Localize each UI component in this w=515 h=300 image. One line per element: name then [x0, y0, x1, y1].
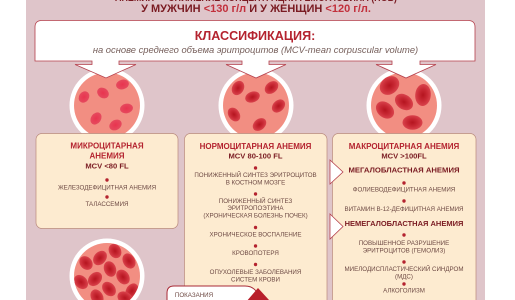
heading: classification: КЛАССИФИКАЦИЯ:	[195, 29, 315, 43]
panel: macrocytic: MCV >100FL	[381, 152, 427, 160]
panel: macrocytic: ЭРИТРОЦИТОВ (ГЕМОЛИЗ)	[363, 248, 445, 254]
panel: normocytic: ХРОНИЧЕСКОЕ ВОСПАЛЕНИЕ	[210, 232, 301, 238]
panel: macrocytic	[332, 134, 476, 300]
panel: normocytic: (ХРОНИЧЕСКАЯ БОЛЕЗНЬ ПОЧЕК)	[203, 212, 308, 220]
panel: macrocytic: ФОЛИЕВОДЕФИЦИТНАЯ АНЕМИЯ	[353, 186, 455, 194]
header text: У МУЖЧИН <130 г/л И У ЖЕНЩИН <120 г/л.	[141, 3, 371, 15]
panel: microcytic: MCV <80 FL	[85, 162, 129, 170]
panel: normocytic: НОРМОЦИТАРНАЯ АНЕМИЯ	[200, 142, 312, 151]
panel: macrocytic: МИЕЛОДИСПЛАСТИЧЕСКИЙ СИНДРОМ	[344, 265, 464, 273]
circle: microcytic	[70, 68, 144, 143]
panel: normocytic	[184, 134, 327, 300]
callout: indications	[167, 286, 256, 300]
icon: red arrow	[246, 288, 269, 300]
header text	[115, 0, 397, 15]
panel: microcytic: ЖЕЛЕЗОДЕФИЦИТНАЯ АНЕМИЯ	[58, 184, 156, 192]
circle: macrocytic	[366, 68, 442, 143]
panel: normocytic: В КОСТНОМ МОЗГЕ	[226, 180, 285, 186]
panel: normocytic: ПОНИЖЕННЫЙ СИНТЕЗ ЭРИТРОЦИТОВ	[194, 171, 317, 179]
panel: normocytic: СИСТЕМ КРОВИ	[231, 276, 280, 284]
panel: macrocytic: ПОВЫШЕННОЕ РАЗРУШЕНИЕ	[359, 240, 449, 247]
arrow: non-megaloblastic	[330, 214, 343, 239]
circle: normocytic	[218, 68, 294, 143]
label: indications: ПОКАЗАНИЯ	[175, 292, 213, 299]
panel: microcytic: АНЕМИЯ	[89, 152, 125, 160]
callout: classification	[35, 20, 475, 78]
panel: macrocytic: АЛКОГОЛИЗМ	[383, 288, 425, 294]
panel: microcytic: МИКРОЦИТАРНАЯ	[70, 142, 144, 150]
panel: microcytic: ТАЛАССЕМИЯ	[85, 201, 129, 208]
panel: macrocytic: МАКРОЦИТАРНАЯ АНЕМИЯ	[349, 142, 459, 151]
panel: macrocytic: (МДС)	[395, 274, 413, 280]
panel: normocytic: ОПУХОЛЕВЫЕ ЗАБОЛЕВАНИЯ	[210, 269, 301, 276]
panel: normocytic: ЭРИТРОПОЭТИНА	[227, 205, 284, 212]
arrow: megaloblastic	[330, 160, 343, 184]
panel: macrocytic: ВИТАМИН В-12-ДЕФИЦИТНАЯ АНЕМИЯ	[344, 206, 464, 213]
panel: macrocytic: НЕМЕГАЛОБЛАСТНАЯ АНЕМИЯ	[345, 219, 463, 228]
panel: microcytic	[36, 134, 178, 228]
circle: blood sample with many cells	[70, 238, 144, 300]
panel: normocytic: КРОВОПОТЕРЯ	[232, 250, 279, 257]
subtitle: на основе среднего объема эритроцитов (MCV-mean corpuscular volume)	[93, 44, 418, 55]
panel: normocytic: ПОНИЖЕННЫЙ СИНТЕЗ	[219, 197, 293, 205]
panel: normocytic: MCV 80-100 FL	[228, 152, 283, 160]
panel: macrocytic: МЕГАЛОБЛАСТНАЯ АНЕМИЯ	[348, 166, 460, 174]
